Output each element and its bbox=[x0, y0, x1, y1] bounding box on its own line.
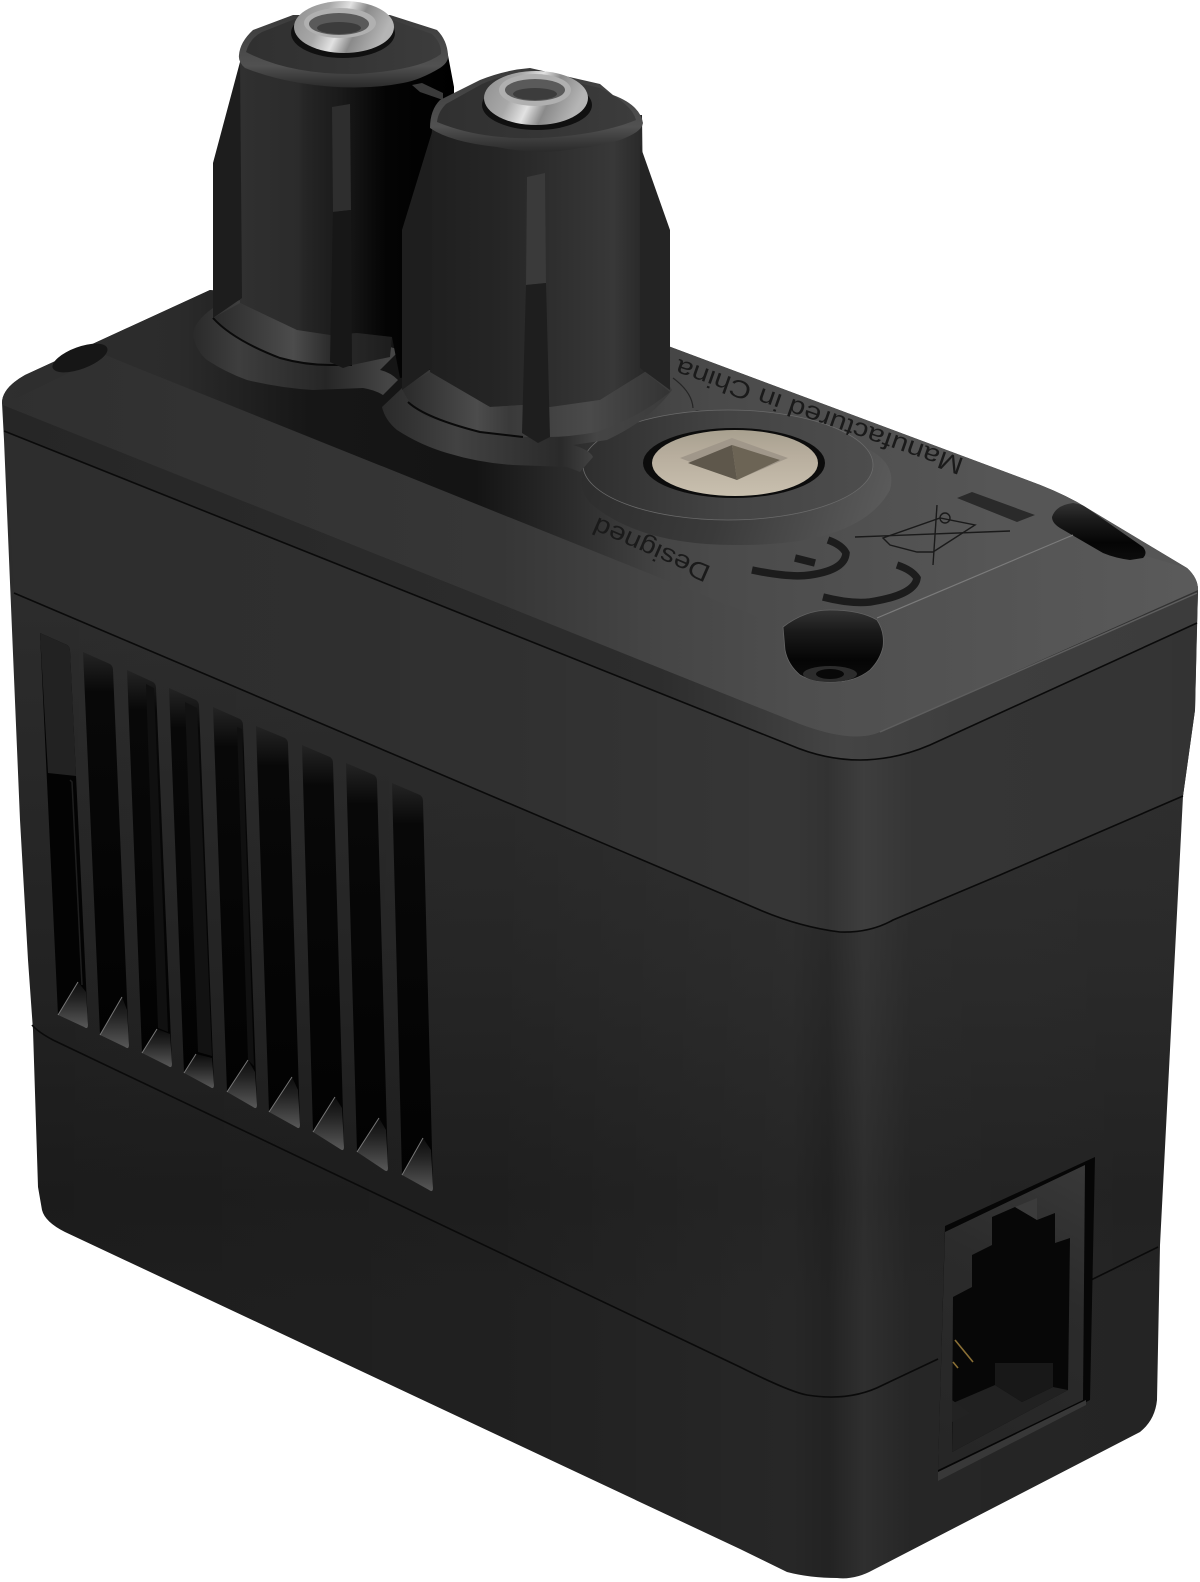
knob front bbox=[382, 68, 672, 472]
RJ port bbox=[938, 1157, 1095, 1481]
letter C bbox=[823, 565, 917, 602]
slot 7 bbox=[302, 745, 344, 1150]
knob rear cap bbox=[239, 15, 448, 88]
rear left hole bbox=[49, 338, 111, 378]
knob rear flange bbox=[193, 300, 400, 395]
knob rear bbox=[193, 1, 455, 395]
knob rear side fin bbox=[213, 62, 242, 318]
rear right slot hole bbox=[1052, 503, 1146, 560]
bushing seat bbox=[643, 428, 825, 498]
port floor bbox=[952, 1385, 1068, 1452]
slot 4 bbox=[169, 688, 214, 1088]
knob front body bbox=[430, 115, 645, 407]
port key step bbox=[1015, 1198, 1037, 1220]
slot 5 bbox=[213, 707, 257, 1108]
knob front flange bbox=[382, 370, 672, 472]
square socket bbox=[680, 438, 788, 480]
knob rear skirt groove bbox=[213, 318, 352, 365]
letter E bbox=[752, 540, 846, 576]
slot 8 bbox=[346, 763, 388, 1171]
marking bar bbox=[957, 492, 1035, 522]
knob front centre rib bbox=[522, 173, 550, 443]
knob rear skirt bbox=[213, 303, 392, 365]
ventilation slots bbox=[40, 633, 433, 1191]
port lower lip bbox=[938, 1400, 1086, 1481]
square socket depth right bbox=[732, 445, 780, 480]
slot 1 bbox=[40, 633, 88, 1028]
recessed label panel edge bbox=[877, 535, 1073, 618]
knob front metal insert bbox=[482, 71, 592, 130]
slot 9 bbox=[392, 783, 433, 1191]
port left block bbox=[952, 1400, 970, 1422]
collar outer bbox=[582, 410, 891, 545]
housing seams bbox=[4, 431, 1197, 1397]
gold pins bbox=[953, 1340, 973, 1368]
knob rear centre rib bbox=[330, 104, 352, 368]
text: Manufactured in China: Manufactured in China bbox=[672, 353, 967, 480]
lid top bbox=[2, 290, 1198, 736]
torx screw bbox=[803, 666, 857, 682]
knob front skirt bbox=[402, 372, 670, 437]
lid fixing holes bbox=[49, 338, 1145, 682]
knob front skirt groove bbox=[408, 402, 523, 437]
icon: WEEE crossed-out bin bbox=[855, 505, 1010, 565]
upper housing section bbox=[4, 431, 1197, 932]
square socket depth bbox=[688, 445, 737, 480]
front screw hole bbox=[783, 610, 883, 682]
port outer recess bbox=[938, 1157, 1095, 1480]
lid rear plane bbox=[2, 290, 1198, 736]
port opening bbox=[952, 1207, 1070, 1452]
lid rim highlight bbox=[880, 593, 1197, 732]
port contact block bbox=[995, 1363, 1053, 1402]
slot 2 bbox=[83, 652, 129, 1048]
lid front plane bbox=[3, 355, 1198, 736]
knob front cap bbox=[430, 68, 643, 152]
knob front right fin bbox=[640, 145, 670, 390]
knob rear body bbox=[240, 50, 455, 378]
adjustment bushing collar bbox=[582, 410, 891, 545]
collar flat ring bbox=[583, 410, 873, 520]
beige bushing bbox=[652, 430, 818, 496]
slot 3 bbox=[127, 670, 172, 1067]
groove behind front knob bbox=[673, 378, 693, 408]
slot 6 bbox=[256, 726, 300, 1128]
icon: CE mark bbox=[752, 540, 917, 602]
port frame bbox=[938, 1165, 1085, 1470]
lid lower band bbox=[3, 405, 1198, 760]
text: Designed: Designed bbox=[589, 511, 714, 587]
knob rear metal insert bbox=[291, 1, 395, 58]
knob rear link bbox=[412, 83, 443, 100]
knob front left fin bbox=[402, 132, 432, 390]
